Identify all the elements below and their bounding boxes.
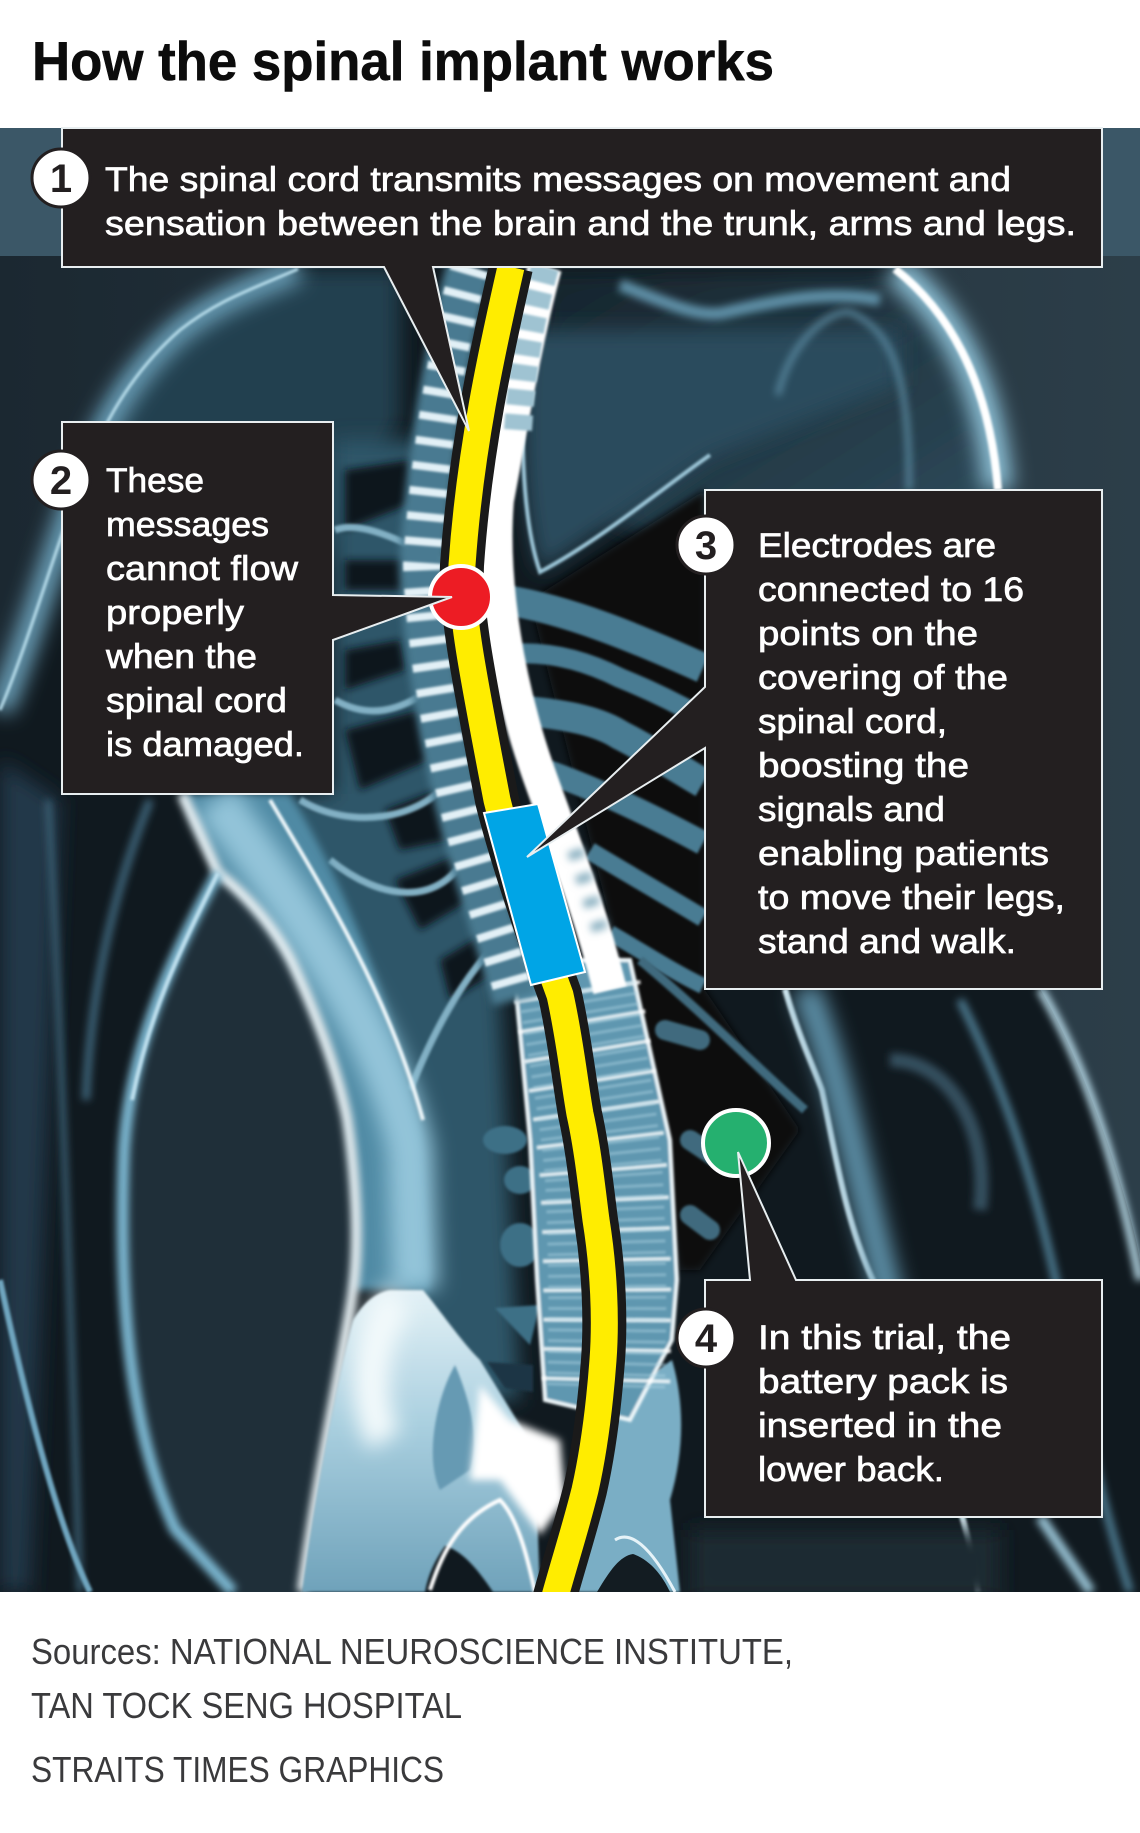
dark gap between arm and torso <box>123 873 356 1592</box>
body silhouette <box>0 269 1140 1592</box>
callout 4 text: inserted in the <box>758 1407 1002 1445</box>
shoulder rims <box>0 269 298 710</box>
callout 2 text: spinal cord <box>106 682 287 720</box>
callout 4 text: lower back. <box>758 1451 944 1489</box>
callout 1 text <box>105 161 1076 243</box>
callout 3 text: enabling patients <box>758 835 1049 873</box>
callout 2 <box>32 422 452 794</box>
callout 3 text: points on the <box>758 615 978 653</box>
callout 2 text: when the <box>105 638 257 676</box>
torso rim <box>182 794 356 1592</box>
dark region behind right ribs <box>530 490 800 1270</box>
title: How the spinal implant works <box>32 30 774 92</box>
pelvis <box>302 1290 565 1592</box>
sources and credit: Sources: NATIONAL NEUROSCIENCE INSTITUTE, <box>31 1631 793 1672</box>
left rib cage <box>250 440 520 1400</box>
callout 3 text: signals and <box>758 791 945 829</box>
arm rim <box>123 873 233 1592</box>
callout 2 text: is damaged. <box>106 726 304 764</box>
left shoulder tint <box>114 268 410 557</box>
left arm shading <box>0 760 60 1592</box>
callout 3 text: boosting the <box>758 747 969 785</box>
callout 4 text: In this trial, the <box>758 1319 1011 1357</box>
callout 3 text: covering of the <box>758 659 1008 697</box>
callout 3 text: connected to 16 <box>758 571 1024 609</box>
callout 3 text: to move their legs, <box>758 879 1065 917</box>
number badge 3 <box>677 516 735 574</box>
callout 1 <box>32 128 1102 431</box>
callout 2 text <box>105 462 304 764</box>
right ribs <box>505 600 703 986</box>
flank band <box>182 794 430 1290</box>
right shoulder tint <box>550 269 994 536</box>
number badge 2: 2 <box>50 459 72 503</box>
callout 4 <box>677 1152 1102 1517</box>
number badge 2 <box>32 451 90 509</box>
callout 2 text: messages <box>106 506 269 544</box>
sources and credit <box>31 1631 793 1790</box>
scapula <box>523 330 900 572</box>
humerus lines <box>620 285 880 314</box>
number badge 4 <box>677 1309 735 1367</box>
right torso and arm rims <box>785 989 978 1592</box>
callout 3 text: stand and walk. <box>758 923 1016 961</box>
sources and credit: STRAITS TIMES GRAPHICS <box>31 1749 444 1790</box>
number badge 3: 3 <box>695 524 717 568</box>
blobs beside lower spine <box>483 1126 540 1345</box>
callout 1 text: sensation between the brain and the trunk, arms and legs. <box>105 205 1076 243</box>
callout 3 text: spinal cord, <box>758 703 947 741</box>
number badge 4: 4 <box>695 1317 718 1361</box>
callout 2 text: These <box>106 462 204 500</box>
marker: blue electrode array <box>484 804 585 985</box>
callout 3 text <box>758 527 1065 961</box>
callout 4 text <box>758 1319 1011 1489</box>
callout 3 text: Electrodes are <box>758 527 996 565</box>
marker: red damage point <box>430 566 492 628</box>
lower back ribs and ovals <box>640 960 805 1230</box>
number badge 1 <box>32 149 90 207</box>
marker: green battery pack <box>703 1110 769 1176</box>
spinal cord <box>462 267 604 1600</box>
callout 2 text: cannot flow <box>106 550 298 588</box>
callout 4 text: battery pack is <box>758 1363 1008 1401</box>
right sacral wing <box>570 1360 681 1592</box>
spine <box>422 267 677 1420</box>
callout 2 text: properly <box>106 594 244 632</box>
callout 3 <box>527 490 1102 989</box>
number badge 1: 1 <box>50 157 72 201</box>
lower body tone <box>690 1530 1000 1600</box>
sources and credit: TAN TOCK SENG HOSPITAL <box>31 1685 462 1726</box>
callout 1 text: The spinal cord transmits messages on movement and <box>105 161 1011 199</box>
